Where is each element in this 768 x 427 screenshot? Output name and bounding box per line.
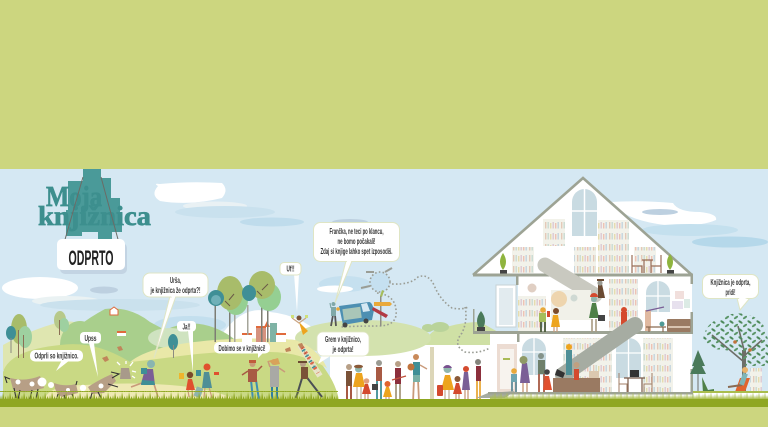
house walls (473, 178, 692, 394)
eaves (473, 274, 693, 276)
wall end posts (488, 276, 693, 394)
signpost (372, 290, 392, 326)
yellow foreground field (45, 384, 232, 398)
sofa (667, 319, 691, 332)
left green hill (3, 338, 339, 400)
man in red shirt (242, 360, 262, 400)
girl with books (179, 370, 201, 397)
speech bubble: Urša: Urša, (170, 276, 181, 285)
entrance ramp (476, 391, 515, 398)
trees: centre group (208, 271, 281, 342)
speech bubble: Odprli so knjižnico (30, 350, 83, 371)
speech bubble: Frančka: Frančka, ne teci po klancu, (330, 227, 384, 236)
top band (0, 0, 768, 169)
grass spikes (0, 391, 338, 399)
main escalator (563, 325, 635, 375)
speech bubble: Ja: Ja!! (182, 322, 190, 332)
people upstairs (539, 279, 627, 332)
speech bubble: Grem v knjižnico: Grem v knjižnico, (325, 335, 361, 344)
speech bubble: Odprli so knjižnico: Odprli so knjižnico. (34, 352, 78, 360)
flying girl in yellow (291, 315, 308, 335)
ground floor window right (616, 338, 641, 378)
reader on orange chair (728, 367, 762, 392)
logo: Moja knjižnica: knjižnica (38, 201, 152, 231)
speech bubble: Frančka: ne bomo počakali! (338, 237, 376, 246)
mother with suitcase (193, 364, 219, 398)
speech bubble: Knjižnica je odprta: pridi! (726, 288, 736, 297)
apple tree (703, 313, 768, 392)
ground floor door (497, 344, 517, 392)
sign: ODPRTO (57, 239, 127, 274)
roof (473, 178, 692, 275)
milk can splash (117, 361, 136, 379)
hilltop buildings (110, 307, 286, 342)
trees: left group (6, 311, 178, 358)
floor divider (473, 331, 693, 334)
running man with books (296, 344, 322, 398)
queue of visitors (346, 347, 497, 402)
speech bubble: Frančka (314, 222, 400, 303)
librarians (566, 344, 580, 380)
attic table and chairs (632, 255, 661, 273)
background hills (3, 309, 500, 400)
van hill (295, 320, 431, 356)
attic plants (500, 253, 674, 274)
white ground behind queue and house (330, 345, 692, 400)
speech bubble: Urša: je knjižnica že odprta?! (150, 286, 200, 295)
grass band (0, 399, 768, 407)
speech bubble: Grem v knjižnico: je odprta! (332, 345, 354, 354)
side table and book stack (645, 307, 666, 332)
logo: Moja knjižnica (38, 169, 152, 243)
upper slide (545, 265, 595, 295)
man by the van (330, 302, 336, 326)
ground floor visitors (511, 353, 552, 392)
upper floor shelves and posters (518, 279, 638, 331)
ground floor shelves (563, 338, 673, 393)
speech bubble: Uf: Uf!! (286, 264, 294, 274)
attic bookshelves (512, 219, 656, 273)
grass spikes on white (490, 393, 768, 400)
cows (5, 372, 119, 401)
running woman in purple (131, 360, 158, 397)
small tree (690, 350, 706, 393)
blue door upper floor (496, 285, 516, 327)
yellow hill crescent (130, 338, 327, 368)
speech bubble: Dobimo se (214, 342, 270, 358)
green line right (693, 391, 768, 393)
speech bubble: Upss (80, 332, 101, 377)
speech bubble: Uf (280, 262, 301, 312)
wall squares (672, 291, 690, 309)
ground strip right (693, 392, 768, 400)
sign: ODPRTO: ODPRTO (68, 247, 114, 270)
logo: Moja knjižnica: Moja (46, 182, 102, 213)
speech bubble: Dobimo se: Dobimo se v knjižnici! (218, 344, 266, 353)
ground floor window left (522, 338, 546, 375)
falling leaves and birds (102, 343, 304, 362)
plant on balcony (473, 309, 485, 333)
green chair (702, 377, 714, 393)
van (336, 302, 374, 328)
computer desk and chairs (619, 370, 652, 392)
sun and dotted route (340, 268, 490, 352)
speech bubble: Upss: Upss (84, 334, 97, 343)
speech bubble: Knjižnica je odprta (702, 274, 758, 310)
reception desk with computer (553, 369, 600, 392)
attic window (572, 189, 597, 236)
bottom band (0, 407, 768, 427)
man in grey (268, 358, 285, 401)
clouds (2, 182, 768, 334)
upper window (646, 281, 670, 312)
speech bubble: Urša (143, 273, 208, 358)
speech bubble: Grem v knjižnico (317, 332, 369, 364)
speech bubble: Ja (177, 321, 196, 372)
speech bubble: Frančka: Zdaj si knjige lahko spet izposodiš. (320, 247, 392, 256)
sky (0, 169, 768, 400)
